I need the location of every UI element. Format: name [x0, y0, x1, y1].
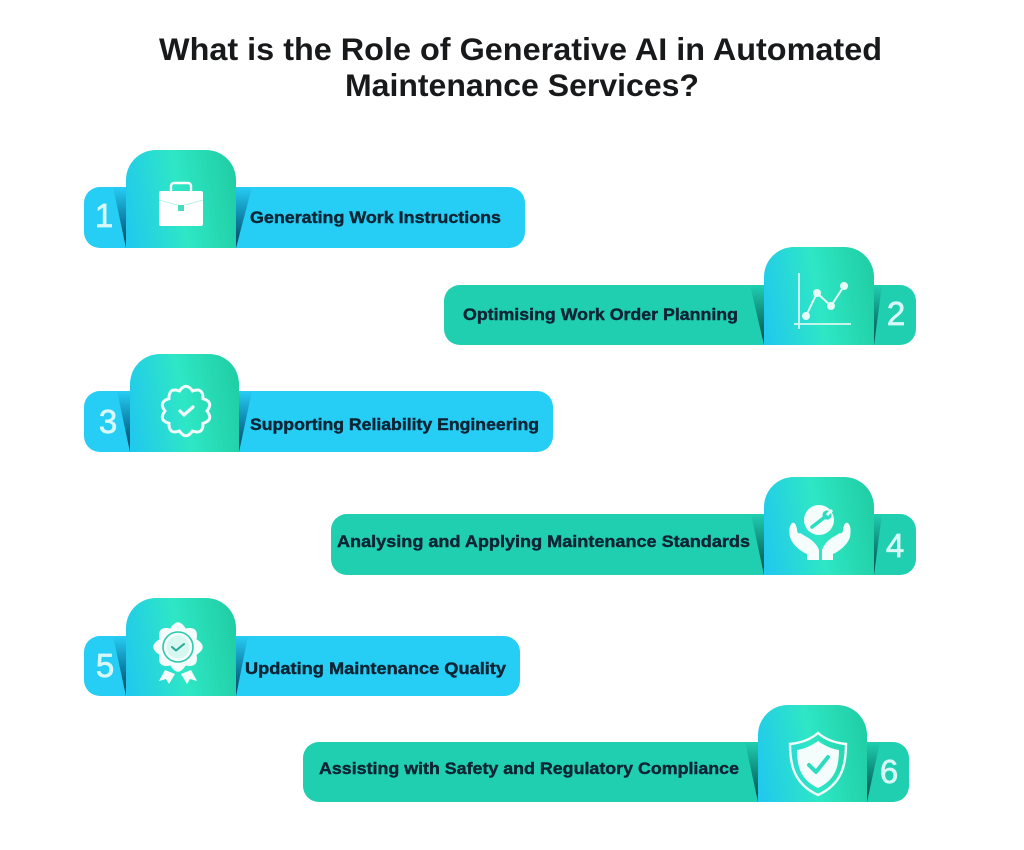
number 5: 5 — [96, 647, 114, 684]
number 6: 6 — [880, 753, 898, 790]
icon: briefcase — [159, 183, 203, 226]
label: Supporting Reliability Engineering — [250, 416, 539, 434]
number 4: 4 — [886, 527, 904, 564]
panel: step 2 optimising work order planning — [444, 247, 916, 345]
number 1: 1 — [95, 197, 113, 234]
panel: step 1 generating work instructions — [84, 150, 525, 248]
icon: shield check — [790, 733, 846, 795]
label: Updating Maintenance Quality — [245, 660, 507, 678]
number 2: 2 — [887, 295, 905, 332]
icon: gear check — [162, 386, 210, 436]
title — [159, 31, 882, 103]
label: Assisting with Safety and Regulatory Compliance — [319, 760, 739, 778]
number 3: 3 — [99, 403, 117, 440]
icon: hands holding wrench — [789, 505, 851, 560]
panel: step 6 assisting with safety and regulatory compliance — [303, 705, 909, 802]
panel: step 5 updating maintenance quality — [84, 598, 520, 696]
label: Optimising Work Order Planning — [463, 306, 738, 324]
icon: line chart — [794, 273, 851, 329]
panel: step 3 supporting reliability engineering — [84, 354, 553, 452]
label: Analysing and Applying Maintenance Standards — [337, 533, 750, 551]
label: Generating Work Instructions — [250, 209, 501, 227]
title: What is the Role of Generative AI in Automated — [159, 31, 882, 67]
title: Maintenance Services? — [345, 67, 699, 103]
icon: award rosette — [153, 622, 203, 684]
panel: step 4 analysing and applying maintenance standards — [331, 477, 916, 575]
